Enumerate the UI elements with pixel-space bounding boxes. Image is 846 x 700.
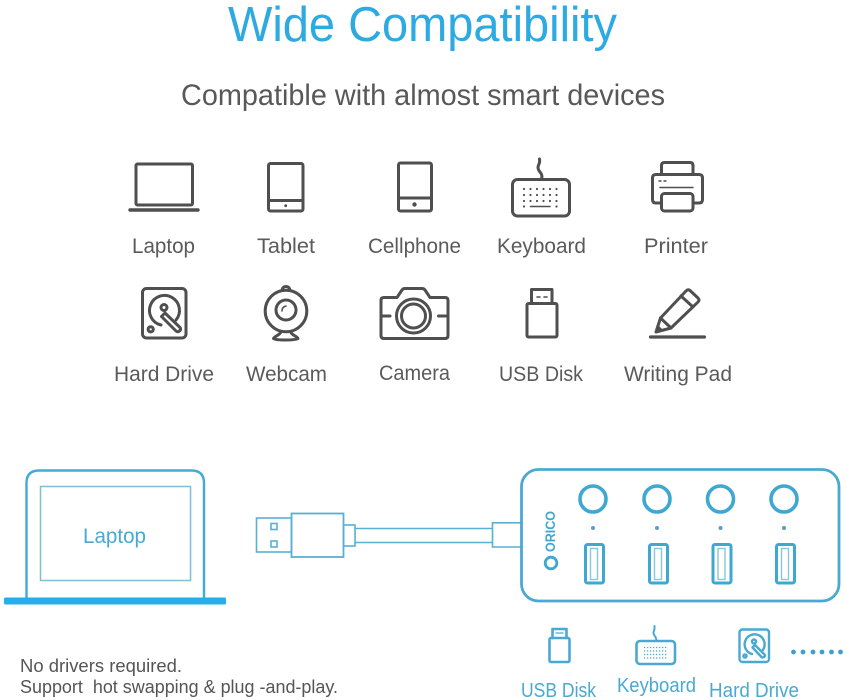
bottom-left description <box>20 656 338 697</box>
hub usb ports <box>586 544 794 583</box>
icon: webcam <box>265 286 307 340</box>
bottom-left description: Support hot swapping & plug -and-play. <box>20 677 338 697</box>
subtitle: Compatible with almost smart devices <box>181 79 665 112</box>
icon: camera <box>381 288 448 338</box>
label: hard drive: Hard Drive <box>114 363 214 386</box>
label: usb disk: USB Disk <box>499 363 583 386</box>
icon: tablet <box>268 164 303 211</box>
icon: writing pad <box>650 290 704 337</box>
label: laptop: Laptop <box>132 235 195 258</box>
icon: cellphone <box>398 163 432 211</box>
icon: blue keyboard <box>636 626 675 664</box>
label: writing pad: Writing Pad <box>624 363 732 386</box>
laptop screen label: Laptop <box>83 525 146 548</box>
label: camera: Camera <box>379 362 450 385</box>
hub indicator lights <box>591 526 786 530</box>
orico logo <box>545 557 557 569</box>
more dots <box>791 650 843 654</box>
bottom-left description: No drivers required. <box>20 656 182 676</box>
icon: blue hard drive <box>740 630 769 662</box>
icon: hard drive <box>142 288 186 338</box>
label: keyboard: Keyboard <box>497 235 586 258</box>
icon: blue usb disk <box>550 629 570 662</box>
label: blue keyboard: Keyboard <box>617 675 696 697</box>
illustration: blue laptop <box>4 470 226 604</box>
hub buttons <box>580 486 797 512</box>
label: printer: Printer <box>644 235 708 258</box>
icon: keyboard <box>512 159 570 216</box>
icon: printer <box>652 162 702 211</box>
icon: laptop <box>130 164 198 210</box>
illustration: usb hub <box>522 470 839 601</box>
label: cellphone: Cellphone <box>368 235 461 258</box>
label: tablet: Tablet <box>257 235 315 258</box>
icon: usb disk <box>527 290 557 337</box>
label: webcam: Webcam <box>246 363 327 386</box>
orico brand: ORICO <box>543 511 558 552</box>
illustration: usb cable and plug <box>256 514 521 557</box>
